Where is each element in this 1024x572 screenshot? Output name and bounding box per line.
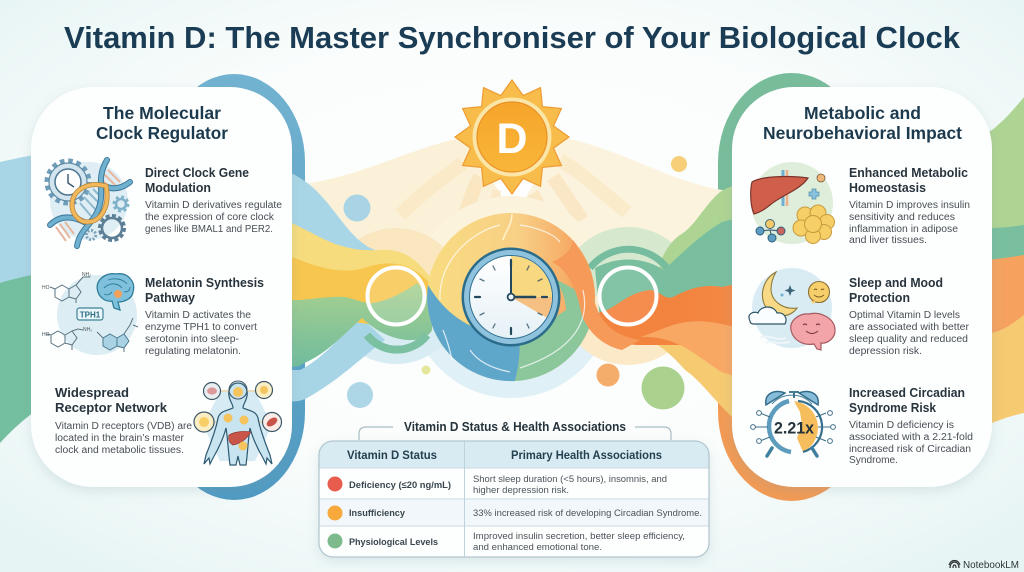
icon: DNA, clock and gears <box>47 160 130 246</box>
text block: direct clock gene modulation <box>145 166 282 235</box>
icon: central clock <box>462 248 560 346</box>
table heading with bracket <box>359 420 671 440</box>
heading: metabolic and neurobehavioral impact: Neurobehavioral Impact <box>763 123 962 143</box>
text block: increased circadian syndrome risk: Syndrome. <box>849 455 898 466</box>
circular swirl around clock <box>427 213 640 381</box>
text block: enhanced metabolic homeostasis: Vitamin D improves insulin <box>849 200 970 211</box>
row: physiological levels: Physiological Levels <box>349 537 438 548</box>
row: insufficiency <box>328 506 702 520</box>
icon: alarm clock 2.21x: 2.21x <box>774 418 815 438</box>
text block: sleep and mood protection: Sleep and Mood <box>849 276 943 290</box>
icon: body receptor network <box>194 381 282 465</box>
text block: widespread receptor network: Widespread <box>55 386 129 400</box>
text block: sleep and mood protection: are associated with better <box>849 322 970 333</box>
row: deficiency <box>328 474 667 496</box>
text block: increased circadian syndrome risk: Syndrome Risk <box>849 401 936 415</box>
text block: melatonin synthesis pathway: enzyme TPH1 to convert <box>145 322 257 333</box>
text block: direct clock gene modulation: genes like BMAL1 and PER2. <box>145 224 273 235</box>
text block: widespread receptor network: Vitamin D receptors (VDB) are <box>55 421 192 432</box>
text block: melatonin synthesis pathway: Pathway <box>145 291 195 305</box>
row: physiological levels: and enhanced emotional tone. <box>473 542 602 553</box>
row: insufficiency: 33% increased risk of developing Circadian Syndrome. <box>473 508 702 519</box>
arc: green and orange behind right panel <box>718 73 865 501</box>
icon: liver, molecule and fat cells <box>751 162 834 244</box>
icon: vitamin D sun <box>455 80 569 194</box>
row: insufficiency: Insufficiency <box>349 508 406 519</box>
icon: moon, smile and brain <box>749 268 835 350</box>
text block: melatonin synthesis pathway: regulating melatonin. <box>145 346 241 357</box>
text block: increased circadian syndrome risk <box>849 386 973 466</box>
text block: increased circadian syndrome risk: Vitamin D deficiency is <box>849 420 954 431</box>
table heading with bracket: Vitamin D Status & Health Associations <box>404 420 626 434</box>
text block: direct clock gene modulation: Modulation <box>145 181 211 195</box>
pale ring around clock <box>410 196 612 398</box>
left node halo <box>328 228 464 364</box>
table header: Primary Health Associations <box>511 448 662 462</box>
icon: melatonin pathway: HO <box>42 332 50 338</box>
row: deficiency: Deficiency (≤20 ng/mL) <box>349 480 451 491</box>
text block: melatonin synthesis pathway <box>145 276 264 357</box>
heading: molecular clock regulator <box>96 103 228 143</box>
icon: alarm clock 2.21x <box>751 392 835 456</box>
icon: melatonin pathway: NH₂ <box>82 272 91 278</box>
row: deficiency: Short sleep duration (<5 hours), insomnis, and <box>473 474 667 485</box>
text block: increased circadian syndrome risk: associated with a 2.21-fold <box>849 432 973 443</box>
heading: molecular clock regulator: Clock Regulator <box>96 123 228 143</box>
table header <box>347 448 662 462</box>
icon: melatonin pathway: TPH1 <box>80 310 101 320</box>
text block: widespread receptor network: located in the brain’s master <box>55 433 185 444</box>
text block: increased circadian syndrome risk: Increased Circadian <box>849 386 965 400</box>
heading: molecular clock regulator: The Molecular <box>103 103 221 123</box>
title: Vitamin D: The Master Synchroniser of Your Biological Clock <box>64 21 960 55</box>
icon: melatonin pathway: HO <box>42 285 50 291</box>
text block: enhanced metabolic homeostasis: Enhanced Metabolic <box>849 166 968 180</box>
text block: sleep and mood protection: sleep quality and reduced <box>849 334 968 345</box>
icon: melatonin pathway <box>42 272 138 355</box>
text block: direct clock gene modulation: Vitamin D derivatives regulate <box>145 200 282 211</box>
heading: metabolic and neurobehavioral impact <box>763 103 962 143</box>
right node halo <box>559 227 697 365</box>
panel: metabolic and neurobehavioral impact <box>732 87 992 487</box>
panel: molecular clock regulator <box>31 87 292 487</box>
ring node right <box>600 268 656 324</box>
sun rays and cream waves <box>270 137 760 270</box>
table: vitamin D status and health associations <box>319 441 709 557</box>
text block: melatonin synthesis pathway: Vitamin D activates the <box>145 310 251 321</box>
flowing waves right <box>590 97 1024 425</box>
row: deficiency: higher depression risk. <box>473 485 569 496</box>
row: physiological levels: Improved insulin secretion, better sleep efficiency, <box>473 531 685 542</box>
arc: blue behind left panel <box>163 74 305 500</box>
heading: metabolic and neurobehavioral impact: Metabolic and <box>804 103 921 123</box>
icon: melatonin pathway: NH₂ <box>83 327 92 333</box>
text block: enhanced metabolic homeostasis: inflammation in adipose <box>849 224 958 235</box>
text block: widespread receptor network: clock and metabolic tissues. <box>55 445 184 456</box>
text block: enhanced metabolic homeostasis <box>849 166 970 246</box>
flowing waves left <box>0 146 438 443</box>
icon: vitamin D sun: D <box>496 115 528 163</box>
text block: sleep and mood protection: Protection <box>849 291 910 305</box>
text block: sleep and mood protection <box>849 276 970 357</box>
row: physiological levels <box>328 531 685 553</box>
text block: enhanced metabolic homeostasis: Homeostasis <box>849 181 926 195</box>
text block: melatonin synthesis pathway: Melatonin Synthesis <box>145 276 264 290</box>
text block: direct clock gene modulation: the expression of core clock <box>145 212 275 223</box>
text block: increased circadian syndrome risk: increased risk of Circadian <box>849 444 971 455</box>
text block: enhanced metabolic homeostasis: and liver tissues. <box>849 235 927 246</box>
text block: melatonin synthesis pathway: serotonin into sleep- <box>145 334 239 345</box>
decorative dots <box>344 156 687 410</box>
text block: widespread receptor network <box>55 386 192 456</box>
watermark: NotebookLM: NotebookLM <box>963 559 1019 571</box>
text block: sleep and mood protection: depression risk. <box>849 346 922 357</box>
table header: Vitamin D Status <box>347 448 437 462</box>
text block: direct clock gene modulation: Direct Clock Gene <box>145 166 249 180</box>
text block: enhanced metabolic homeostasis: sensitivity and reduces <box>849 212 955 223</box>
text block: sleep and mood protection: Optimal Vitamin D levels <box>849 310 960 321</box>
ring node left <box>368 268 424 324</box>
text block: widespread receptor network: Receptor Network <box>55 401 167 415</box>
